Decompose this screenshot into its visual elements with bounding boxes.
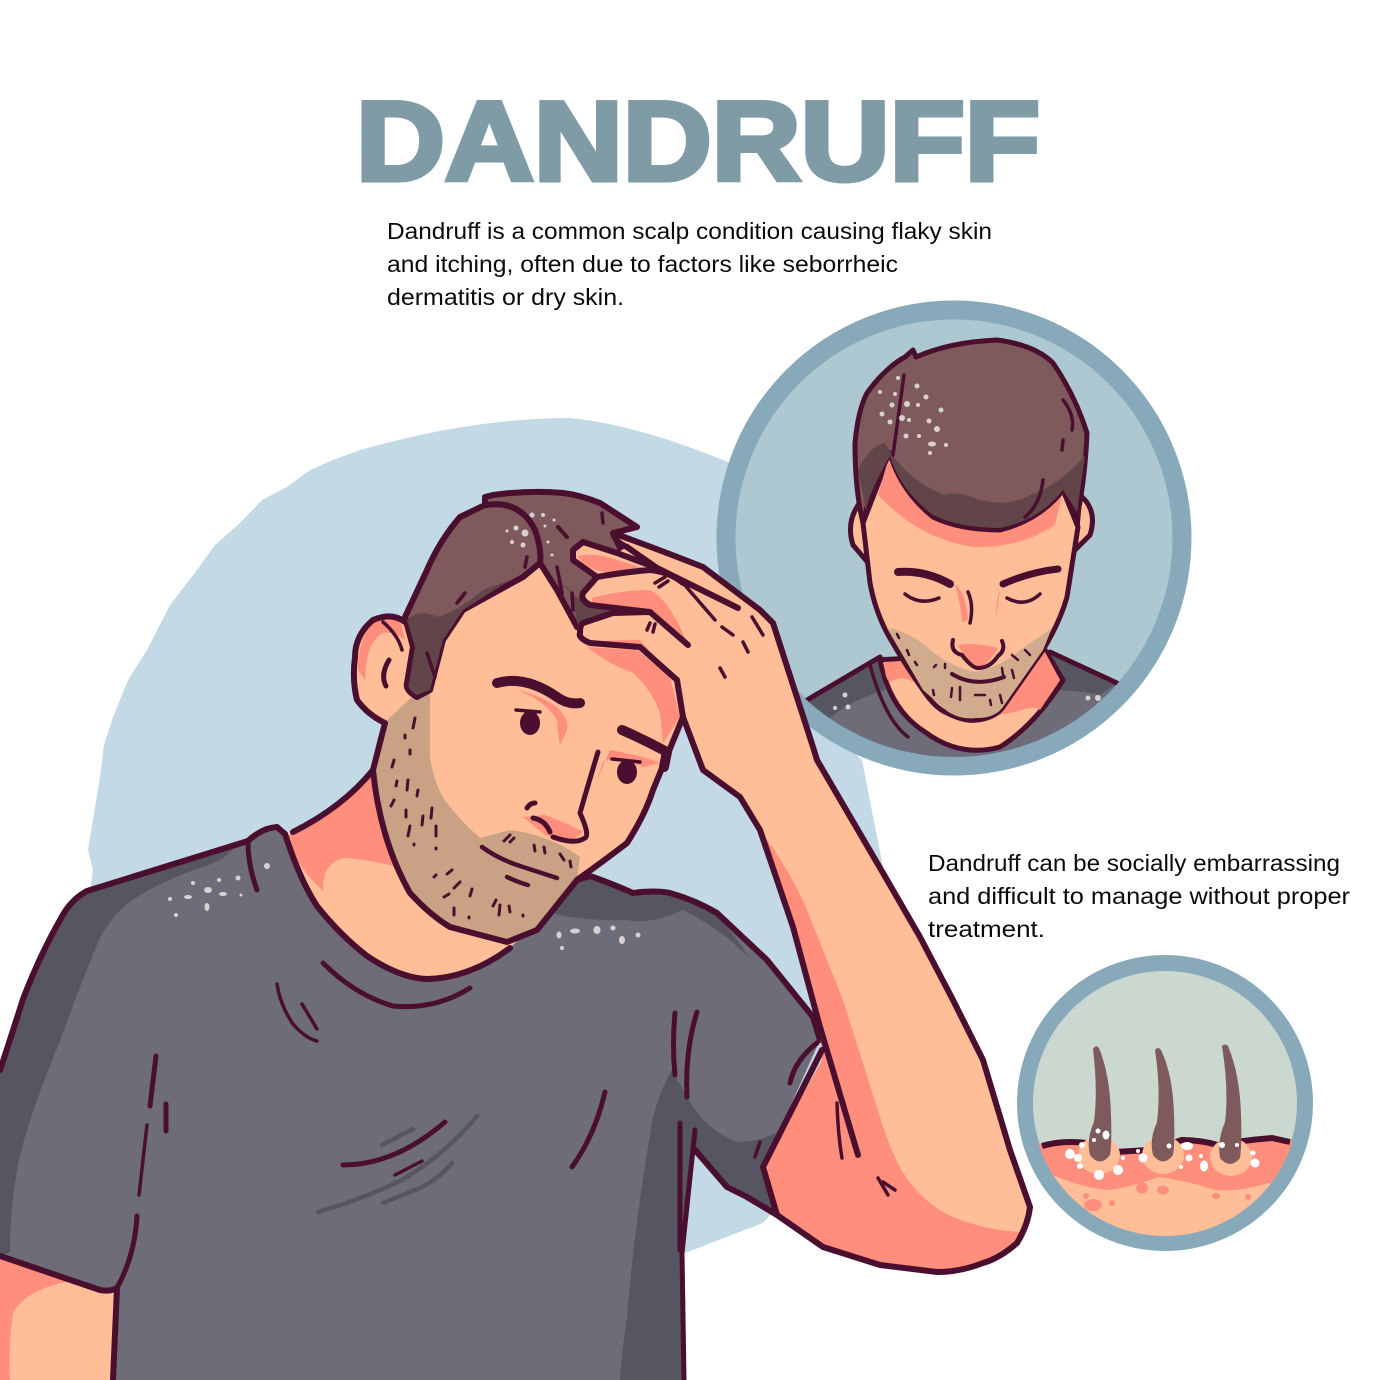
- hair: [405, 492, 650, 697]
- mouth: [482, 847, 557, 885]
- background blob: [88, 418, 900, 1253]
- hairs: [1089, 1044, 1241, 1164]
- face: [373, 540, 690, 942]
- text block: intro: [387, 218, 992, 310]
- inset hair: [855, 340, 1087, 530]
- text block: intro: Dandruff is a common scalp condition causing flaky skin: [387, 218, 992, 244]
- shirt shadows: [0, 849, 233, 1256]
- inset brows, eyes, nose, mouth: [898, 569, 1058, 682]
- eyebrows: [497, 681, 580, 703]
- inset: man looking down: [726, 310, 1182, 800]
- ear: [354, 616, 425, 723]
- stubble marks: [391, 718, 571, 918]
- eyes: [516, 710, 540, 712]
- arm shadows: [760, 830, 1020, 1272]
- shirt: [0, 827, 820, 1380]
- lower left arm: [0, 1256, 117, 1380]
- text block: social impact: Dandruff can be socially embarrassing: [928, 850, 1340, 876]
- main figure: man scratching head: [0, 492, 1030, 1380]
- shirt creases: [323, 963, 470, 1007]
- text block: social impact: treatment.: [928, 916, 1045, 942]
- hair flakes: [506, 512, 556, 556]
- hand and elbow details: [647, 577, 895, 1195]
- inset neck: [880, 650, 1063, 750]
- text block: intro: and itching, often due to factors like seborrheic: [387, 251, 898, 277]
- nose: [523, 815, 583, 842]
- inset stubble: [897, 634, 1030, 705]
- inset face: [863, 453, 1078, 720]
- text block: social impact: [928, 850, 1350, 942]
- stubble: [373, 693, 580, 942]
- inset ears: [850, 495, 1092, 565]
- forearm and hand: [573, 533, 1030, 1272]
- face shadows: [517, 647, 680, 780]
- shoulder flakes: [168, 863, 640, 950]
- skin spots: [1083, 1182, 1251, 1211]
- neck: [285, 770, 580, 979]
- flakes: [1065, 1128, 1260, 1180]
- inset flakes: [833, 376, 1101, 710]
- text block: intro: dermatitis or dry skin.: [387, 284, 624, 310]
- inset shirt: [809, 650, 1118, 757]
- skin layers: [1053, 1175, 1277, 1236]
- follicles: [1078, 1136, 1120, 1174]
- text block: social impact: and difficult to manage without proper: [928, 883, 1350, 909]
- inset: scalp cross-section: [1025, 963, 1305, 1245]
- title: DANDRUFF: [356, 79, 1040, 204]
